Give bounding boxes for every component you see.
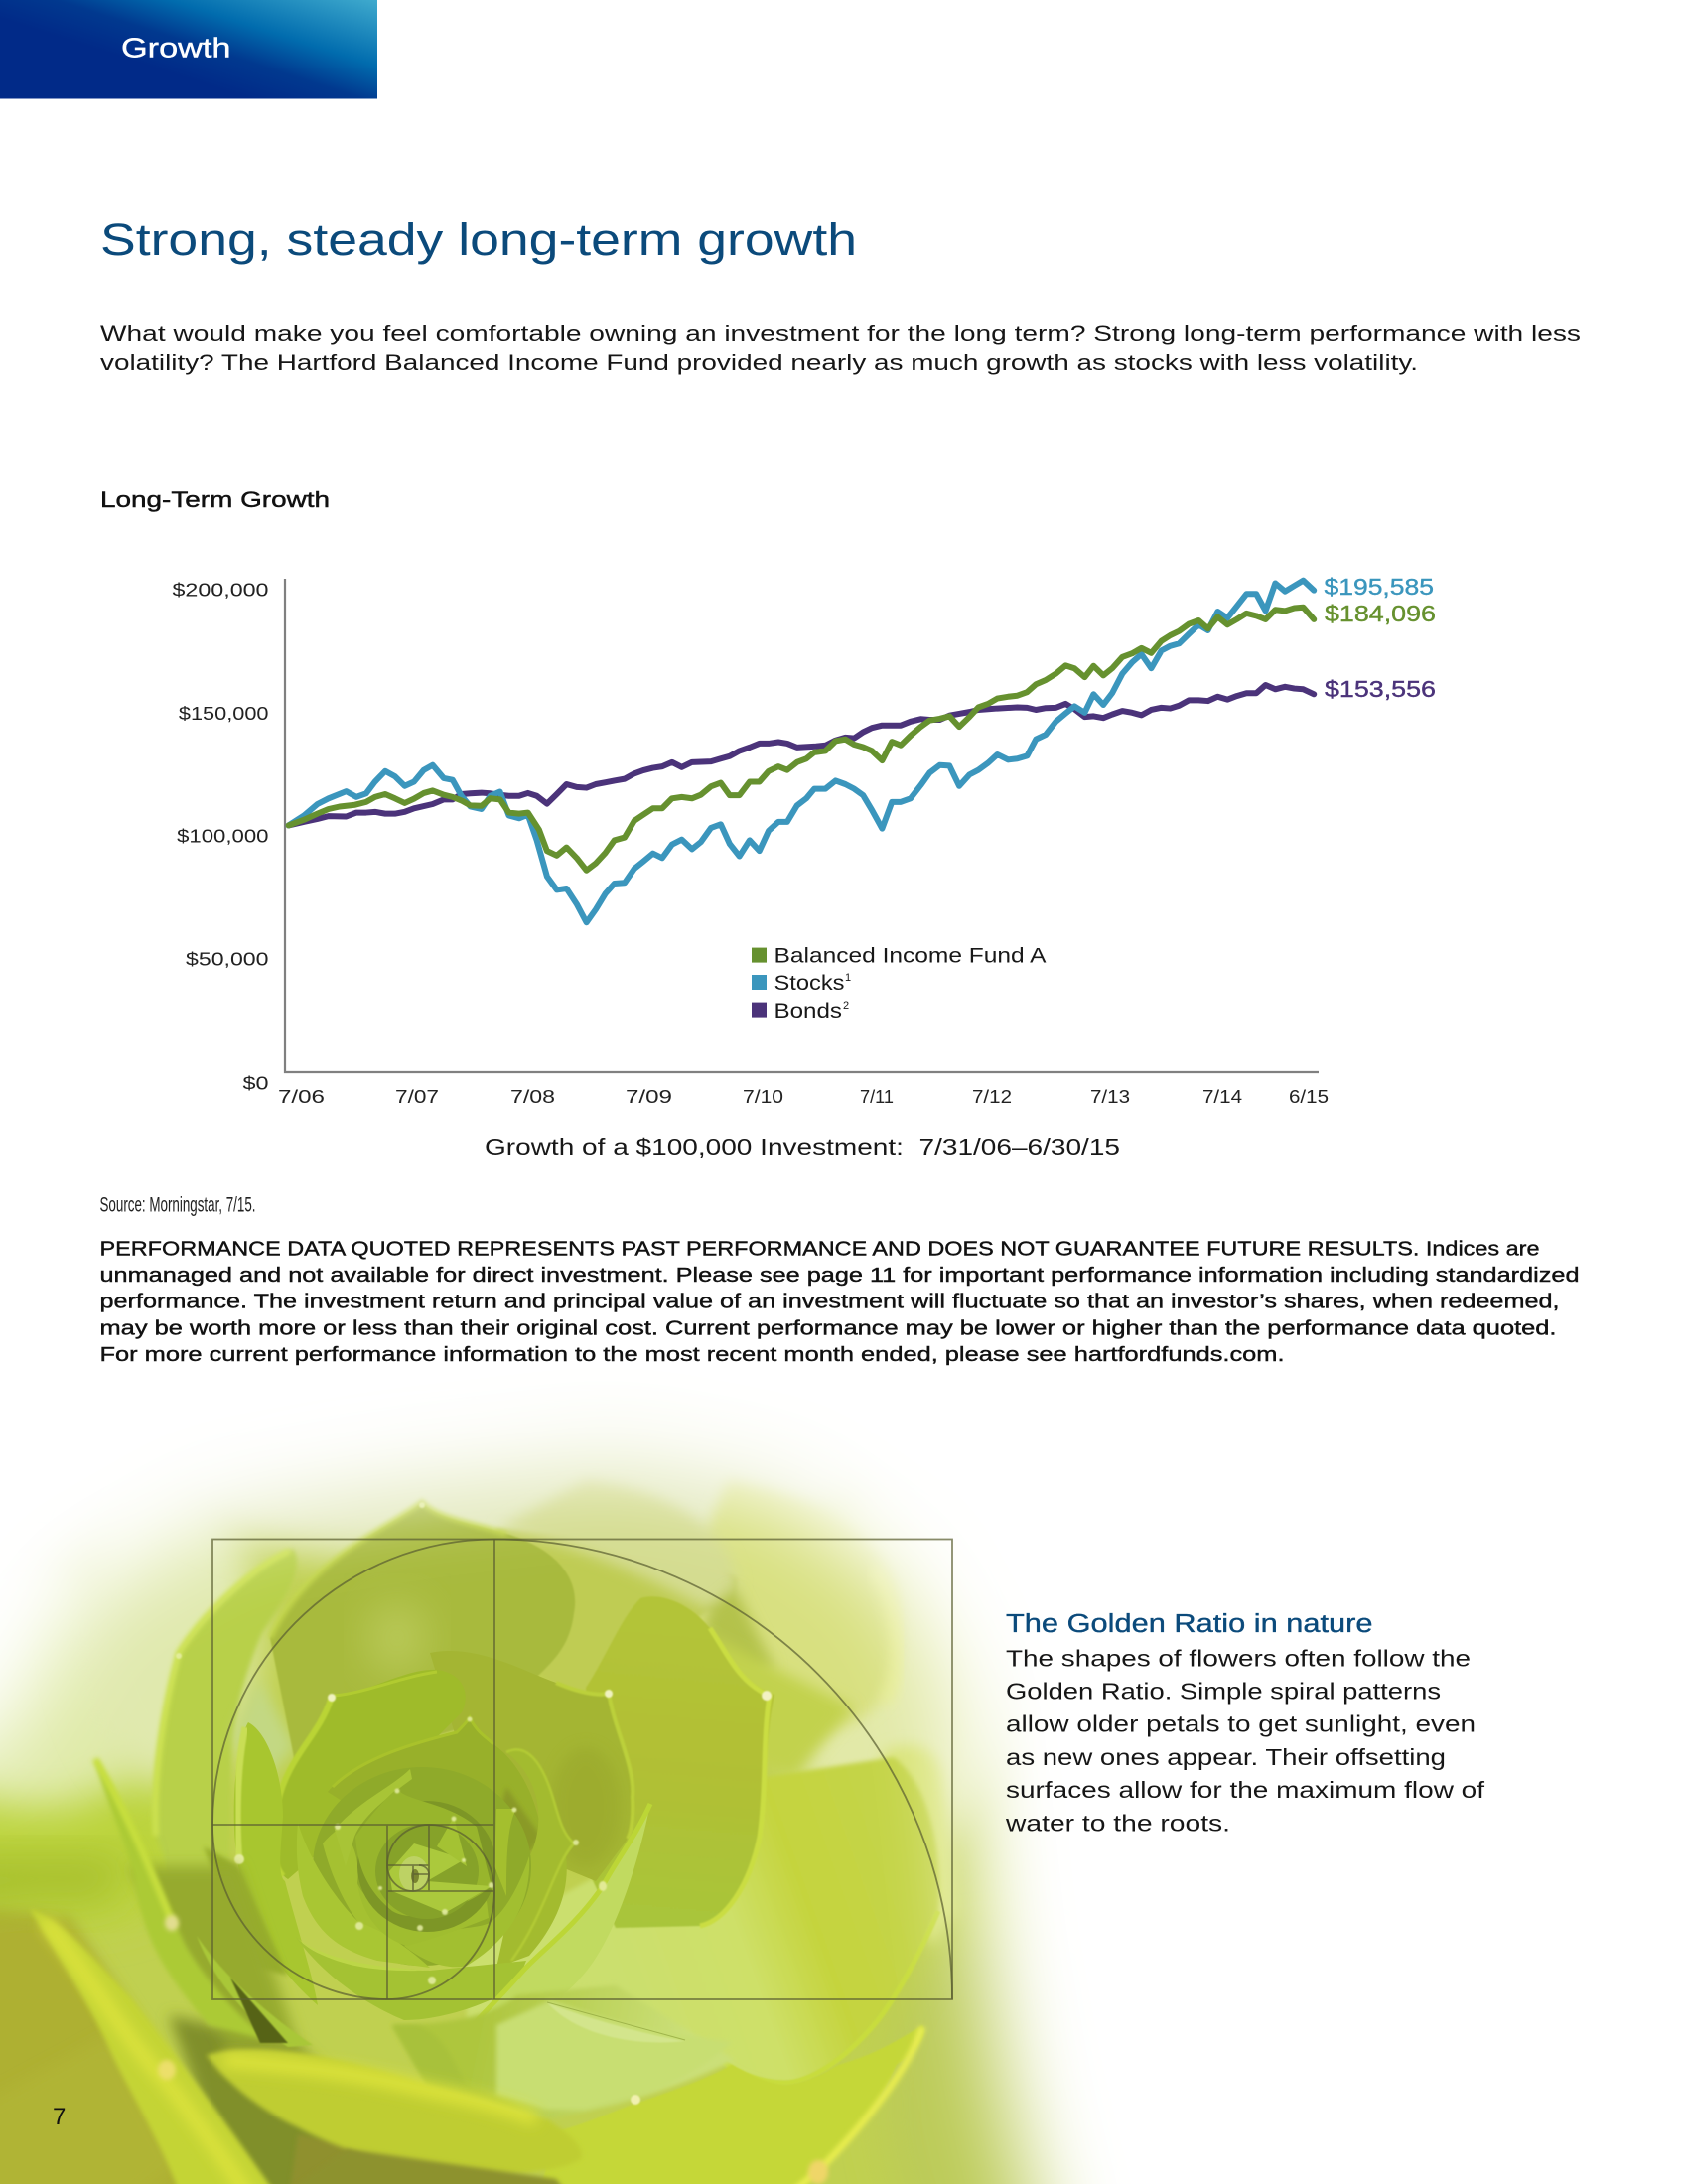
chart caption: Growth of a $100,000 Investment: 7/31/06–6/30/15 [485, 1134, 1120, 1160]
x-axis labels: 6/15 [1289, 1086, 1329, 1107]
x-axis labels: 7/08 [510, 1086, 555, 1107]
x-axis labels: 7/07 [395, 1086, 439, 1107]
title: Strong, steady long-term growth [100, 214, 857, 265]
source note: Source: Morningstar, 7/15. [99, 1194, 256, 1217]
y-axis labels: $100,000 [177, 826, 268, 847]
end value labels: $195,585 [1325, 574, 1434, 600]
golden ratio rectangle overlay and spiral [212, 1539, 952, 1999]
header band: Growth [0, 0, 377, 99]
upper right rose petal [430, 1651, 633, 1881]
golden ratio body text: allow older petals to get sunlight, even [1006, 1711, 1476, 1737]
series: Stocks [289, 581, 1314, 922]
top petal [270, 1502, 575, 1777]
central bottom petal [419, 1986, 731, 2115]
performance disclaimer: performance. The investment return and principal value of an investment will fluctuate so that an investor’s shares, when redeemed, [99, 1292, 1559, 1313]
performance disclaimer [99, 1238, 1579, 1366]
end value labels: $153,556 [1325, 676, 1436, 702]
pale leaf fold [496, 2000, 733, 2110]
main yellow leaf [30, 1909, 283, 2184]
lower right crescent [404, 1856, 529, 1967]
x-axis labels: 7/09 [626, 1086, 672, 1107]
swirl centre [357, 1801, 496, 1932]
legend: 2 [843, 1000, 849, 1012]
legend: Bonds [774, 1000, 842, 1023]
chart heading: Long-Term Growth: Long-Term Growth [100, 487, 330, 512]
narrow inner petal [494, 1809, 516, 1896]
left base tones [0, 1906, 178, 2184]
golden ratio body text: as new ones appear. Their offsetting [1006, 1744, 1446, 1770]
series: Balanced Income Fund A [289, 608, 1314, 871]
base tone and soft background [0, 1512, 1045, 2184]
intro paragraph: What would make you feel comfortable owning an investment for the long term? Strong long-term performance with less [100, 321, 1581, 345]
dark rose core backing [313, 1767, 531, 1966]
golden ratio text block [1005, 1610, 1485, 1836]
golden ratio body text: water to the roots. [1005, 1810, 1230, 1836]
golden ratio body text: The shapes of flowers often follow the [1006, 1645, 1471, 1671]
legend: 1 [845, 972, 851, 984]
far right petal [874, 1745, 955, 1946]
series: Bonds [289, 685, 1314, 825]
left narrow petal [234, 1722, 318, 2005]
left rose petal [297, 1823, 430, 1968]
x-axis labels: 7/06 [278, 1086, 325, 1107]
upper right outer petal [699, 1478, 900, 1733]
performance disclaimer: PERFORMANCE DATA QUOTED REPRESENTS PAST PERFORMANCE AND DOES NOT GUARANTEE FUTURE RESULTS. Indices are [99, 1238, 1539, 1260]
x-axis labels: 7/10 [743, 1086, 783, 1107]
intro paragraph [100, 321, 1581, 375]
right centre petal [586, 1596, 774, 1928]
data lines [289, 581, 1314, 922]
performance disclaimer: For more current performance information to the most recent month ended, please see hartfordfunds.com. [99, 1344, 1285, 1366]
far left tall petal [154, 1547, 298, 1860]
y-axis labels: $50,000 [186, 949, 268, 969]
performance disclaimer: may be worth more or less than their original cost. Current performance may be lower or higher than the performance data quoted. [99, 1317, 1557, 1339]
legend: Balanced Income Fund A [774, 945, 1047, 968]
end value labels: $184,096 [1325, 601, 1436, 626]
lower sheet petal [467, 1757, 939, 2083]
header band: Growth: Growth [121, 32, 230, 64]
thin left leaves [95, 1759, 268, 2040]
golden ratio body text [1005, 1645, 1485, 1836]
large right-front leaf [491, 1814, 648, 2009]
petal tip highlights [176, 1502, 579, 1984]
photo: succulent flower [0, 1420, 1094, 2184]
upper left rose petal [274, 1670, 466, 1879]
y-axis labels: $200,000 [173, 580, 268, 601]
bottom right leaf [536, 2025, 924, 2184]
line chart: growth of a $100,000 investment [173, 574, 1436, 1107]
second ring petal [328, 1721, 538, 1829]
x-axis labels: 7/14 [1202, 1086, 1242, 1107]
x-axis labels: 7/12 [972, 1086, 1012, 1107]
golden ratio body text: Golden Ratio. Simple spiral patterns [1006, 1679, 1441, 1705]
lower ring petal [302, 1943, 526, 2020]
chart axes [285, 579, 1319, 1072]
inner petals [357, 1883, 489, 1946]
y-axis labels [173, 580, 268, 1094]
golden spiral [212, 1539, 952, 1999]
bottom front leaf [207, 2049, 582, 2175]
y-axis labels: $150,000 [179, 703, 268, 724]
performance disclaimer: unmanaged and not available for direct investment. Please see page 11 for important performance information including standardized [99, 1265, 1579, 1287]
upper back petal [496, 1527, 738, 1618]
x-axis labels: 7/13 [1090, 1086, 1130, 1107]
x-axis labels [278, 1086, 1329, 1107]
x-axis labels: 7/11 [860, 1086, 894, 1107]
intro paragraph: volatility? The Hartford Balanced Income Fund provided nearly as much growth as stocks with less volatility. [100, 350, 1418, 375]
golden ratio body text: surfaces allow for the maximum flow of [1006, 1777, 1485, 1803]
y-axis labels: $0 [242, 1072, 268, 1094]
right inner petal [496, 1792, 572, 1964]
legend: Stocks [774, 972, 844, 995]
golden ratio heading: The Golden Ratio in nature [1006, 1610, 1372, 1638]
legend [752, 945, 1047, 1023]
page number: 7 [53, 2104, 66, 2130]
end value labels [1325, 574, 1436, 702]
